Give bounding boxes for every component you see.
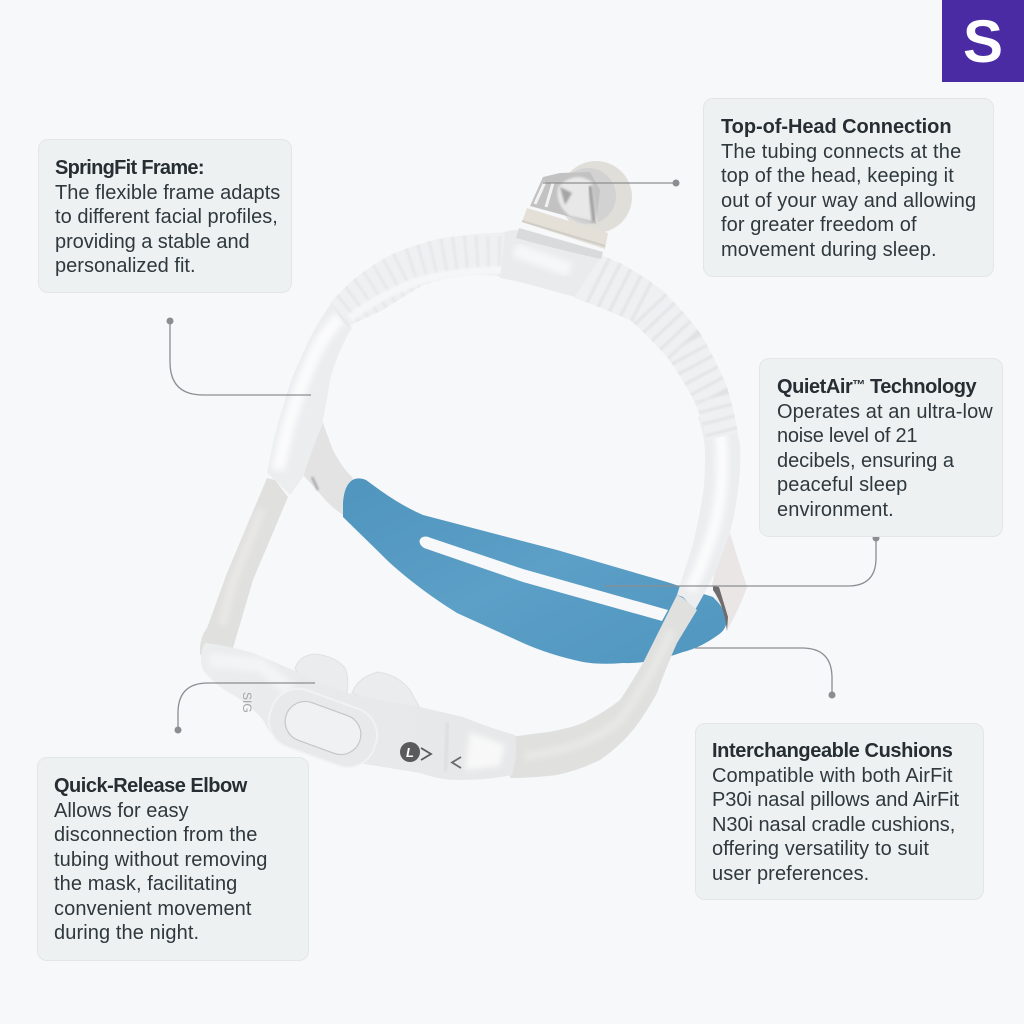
heading: QuietAir™ Technology: [777, 376, 976, 398]
text block: [55, 182, 280, 277]
text block: decibels, ensuring a: [777, 450, 954, 472]
panel: SpringFit Frame: [38, 139, 292, 293]
text block: during the night.: [54, 922, 199, 944]
text block: Compatible with both AirFit: [712, 764, 953, 786]
brand badge: S: [963, 8, 1003, 75]
text block: N30i nasal cradle cushions,: [712, 814, 955, 836]
panel: Quick-Release Elbow: [37, 757, 309, 961]
leader: cushions: [695, 648, 836, 698]
tubing hub: [500, 230, 603, 297]
dark sliver on right tab: [713, 586, 728, 631]
text block: Allows for easy: [54, 800, 188, 822]
strap slot: [420, 536, 668, 621]
L size badge: L: [406, 745, 414, 760]
nasal cushions: [295, 654, 420, 708]
text block: offering versatility to suit: [712, 838, 929, 860]
text block: user preferences.: [712, 862, 869, 884]
panel: Interchangeable Cushions: [695, 723, 984, 900]
L size badge: [400, 742, 461, 768]
text block: noise level of 21: [777, 425, 917, 447]
text block: Operates at an ultra-low: [777, 400, 993, 422]
text block: convenient movement: [54, 898, 252, 920]
product illustration: mask: [200, 161, 747, 780]
text block: out of your way and allowing: [721, 190, 976, 212]
text block: tubing without removing: [54, 848, 268, 870]
text block: peaceful sleep: [777, 474, 907, 496]
text block: environment.: [777, 498, 894, 520]
top connector: [516, 161, 632, 259]
text block: the mask, facilitating: [54, 873, 237, 895]
size marking: SIG: [240, 692, 254, 713]
leader: springfit: [166, 318, 311, 395]
text block: [54, 800, 268, 944]
headband side tabs: [302, 420, 747, 630]
elbow release button: [261, 681, 385, 775]
text block: The flexible frame adapts: [55, 182, 280, 204]
corrugated tubing: [325, 228, 745, 445]
text block: for greater freedom of: [721, 214, 917, 236]
frame: right arm: [510, 410, 740, 778]
text block: [712, 764, 959, 884]
heading: Quick-Release Elbow: [54, 775, 247, 797]
panel: Top-of-Head Connection: [703, 98, 994, 277]
frame: left arm: [200, 302, 352, 655]
text block: disconnection from the: [54, 824, 257, 846]
text block: [777, 400, 993, 520]
panel: QuietAir Technology: [759, 358, 1003, 537]
text block: The tubing connects at the: [721, 140, 961, 162]
text block: top of the head, keeping it: [721, 165, 954, 187]
heading: Top-of-Head Connection: [721, 116, 952, 138]
text block: personalized fit.: [55, 255, 196, 277]
heading: SpringFit Frame:: [55, 157, 204, 179]
brand badge: [942, 0, 1024, 82]
leader: top-of-head: [543, 180, 680, 186]
leader: quietair: [605, 534, 880, 586]
text block: providing a stable and: [55, 230, 250, 252]
text block: P30i nasal pillows and AirFit: [712, 789, 959, 811]
nasal frame: [201, 643, 516, 780]
leader: elbow: [174, 683, 315, 734]
heading: Interchangeable Cushions: [712, 740, 952, 762]
blue headband strap: [343, 478, 727, 664]
text block: to different facial profiles,: [55, 206, 278, 228]
text block: movement during sleep.: [721, 238, 937, 260]
text block: [721, 140, 976, 260]
